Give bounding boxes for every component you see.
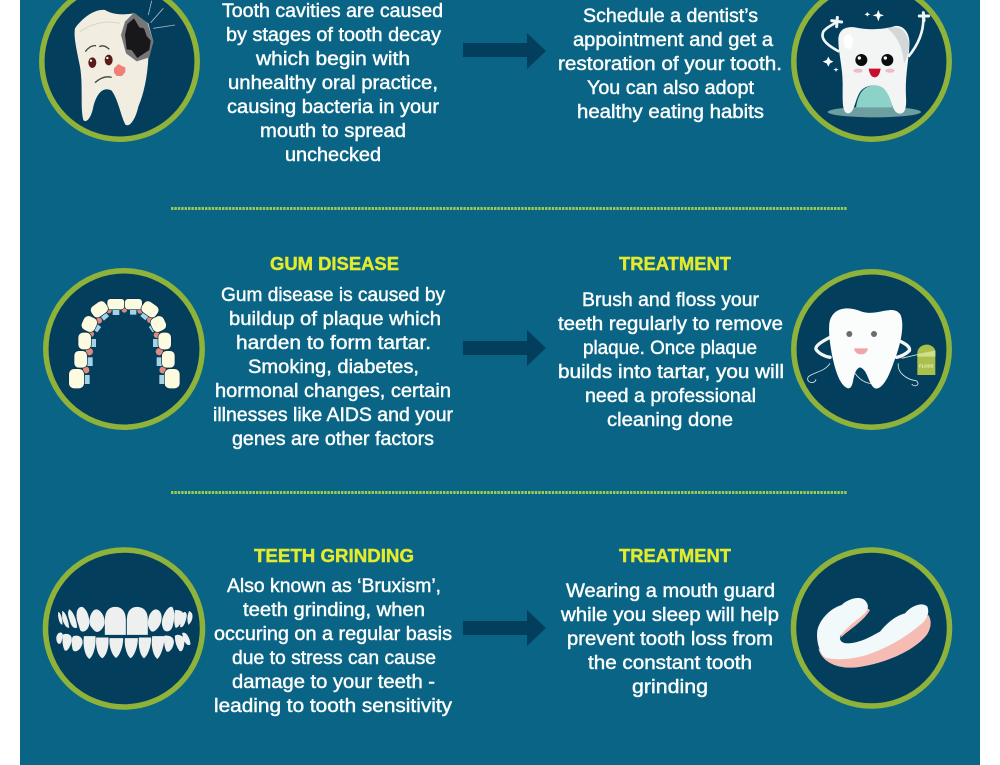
text block: tooth cavities causes bbox=[222, 1, 443, 166]
text block: tooth cavities treatment: You can also adopt bbox=[587, 78, 755, 99]
text block: tooth cavities treatment: Schedule a dentist’s bbox=[583, 6, 758, 27]
arrow: cause to treatment bbox=[463, 330, 546, 366]
text block: gum disease treatment: teeth regularly to remove bbox=[558, 314, 783, 335]
text block: gum disease treatment: Brush and floss your bbox=[582, 290, 760, 311]
text block: gum disease causes bbox=[213, 285, 454, 450]
text block: teeth grinding causes: Also known as ‘Bruxism’, bbox=[227, 576, 441, 597]
text block: teeth grinding causes: due to stress can cause bbox=[232, 648, 436, 669]
divider 1 bbox=[171, 207, 847, 210]
text block: teeth grinding treatment: grinding bbox=[632, 677, 708, 698]
text block: teeth grinding treatment: the constant tooth bbox=[588, 653, 752, 674]
text block: teeth grinding treatment: prevent tooth loss from bbox=[567, 629, 773, 650]
heading: gum disease: GUM DISEASE bbox=[270, 254, 399, 274]
text block: gum disease causes: harden to form tartar. bbox=[236, 333, 431, 354]
text block: gum disease causes: buildup of plaque which bbox=[229, 309, 441, 330]
heading: treatment: TREATMENT bbox=[619, 546, 731, 566]
text block: tooth cavities causes: which begin with bbox=[255, 49, 410, 70]
text block: teeth grinding causes bbox=[214, 576, 453, 717]
text block: tooth cavities causes: causing bacteria in your bbox=[227, 97, 440, 118]
text block: tooth cavities treatment bbox=[558, 6, 782, 123]
heading: treatment: TREATMENT bbox=[619, 254, 731, 274]
icon: clenched teeth in circle bbox=[46, 550, 202, 707]
icon: dental arch in circle bbox=[46, 271, 202, 427]
icon: happy tooth in circle bbox=[794, 0, 949, 139]
text block: teeth grinding causes: leading to tooth sensitivity bbox=[214, 696, 453, 717]
text block: tooth cavities causes: unhealthy oral practice, bbox=[228, 73, 438, 94]
arrow: cause to treatment bbox=[463, 33, 546, 69]
icon: tooth with floss in circle bbox=[794, 272, 949, 427]
text block: gum disease causes: illnesses like AIDS and your bbox=[213, 405, 454, 426]
text block: tooth cavities treatment: restoration of your tooth. bbox=[558, 54, 782, 75]
icon: tooth with floss in circle: FLOSS bbox=[919, 364, 934, 369]
text block: gum disease causes: hormonal changes, certain bbox=[215, 381, 451, 402]
text block: teeth grinding treatment bbox=[560, 581, 779, 698]
text block: tooth cavities causes: unchecked bbox=[285, 145, 381, 166]
text block: teeth grinding treatment: Wearing a mouth guard bbox=[566, 581, 775, 602]
text block: tooth cavities causes: by stages of tooth decay bbox=[226, 25, 442, 46]
text block: gum disease treatment: builds into tartar, you will bbox=[558, 362, 784, 383]
heading: teeth grinding: TEETH GRINDING bbox=[254, 546, 414, 566]
text block: gum disease causes: genes are other factors bbox=[232, 429, 434, 450]
arrow: cause to treatment bbox=[463, 610, 546, 646]
text block: gum disease treatment: need a professional bbox=[585, 386, 756, 407]
text block: tooth cavities causes: mouth to spread bbox=[260, 121, 406, 142]
icon: decayed tooth in circle bbox=[42, 0, 197, 139]
text block: gum disease causes: Smoking, diabetes, bbox=[248, 357, 419, 378]
text block: gum disease treatment bbox=[558, 290, 784, 431]
text block: tooth cavities treatment: appointment and get a bbox=[573, 30, 773, 51]
text block: teeth grinding causes: teeth grinding, when bbox=[243, 600, 425, 621]
row: tooth cavities bbox=[42, 0, 949, 166]
icon: mouth guard in circle bbox=[794, 550, 950, 706]
divider 2 bbox=[171, 491, 847, 494]
text block: teeth grinding causes: occuring on a regular basis bbox=[214, 624, 452, 645]
text block: gum disease treatment: cleaning done bbox=[607, 410, 733, 431]
text block: tooth cavities treatment: healthy eating habits bbox=[577, 102, 764, 123]
text block: gum disease treatment: plaque. Once plaque bbox=[583, 338, 757, 359]
text block: tooth cavities causes: Tooth cavities are caused bbox=[222, 1, 443, 22]
row: gum disease bbox=[46, 254, 949, 450]
text block: teeth grinding causes: damage to your teeth - bbox=[232, 672, 435, 693]
text block: gum disease causes: Gum disease is caused by bbox=[221, 285, 445, 306]
row: teeth grinding bbox=[46, 546, 950, 717]
text block: teeth grinding treatment: while you sleep will help bbox=[560, 605, 779, 626]
